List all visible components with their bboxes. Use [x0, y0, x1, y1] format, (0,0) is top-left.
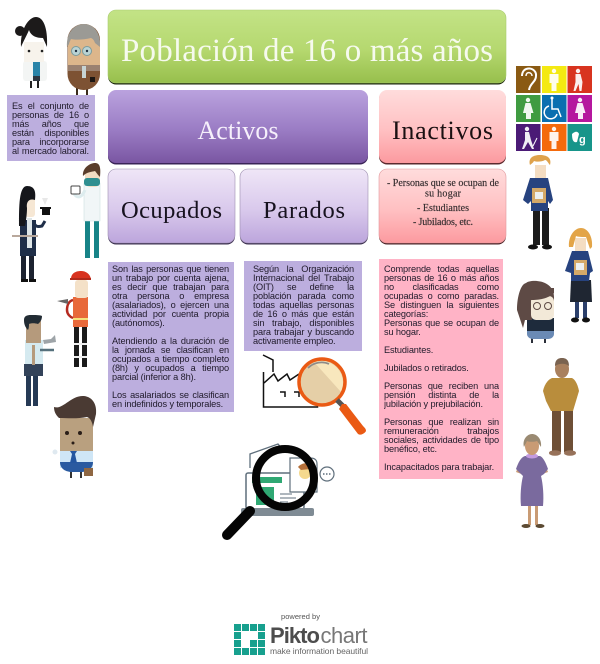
- character: waiter: [24, 315, 56, 406]
- box: list of inactive groups: [379, 169, 506, 244]
- footer: powered by Piktochart: chart: [320, 623, 368, 648]
- character: girl with glasses: [517, 281, 554, 343]
- character: elderly woman in dress: [516, 434, 548, 528]
- character: firefighter: [57, 271, 91, 367]
- box: Ocupados: [108, 169, 235, 244]
- character: student girl: [565, 228, 593, 322]
- icon: laptop under black magnifier: [227, 443, 334, 535]
- box: list of inactive groups: - Estudiantes: [417, 203, 469, 214]
- box: Ocupados: Ocupados: [121, 197, 222, 224]
- title box: [108, 10, 506, 84]
- character: businessman: [52, 396, 96, 478]
- box: list of inactive groups: - Jubilados, etc.: [413, 217, 473, 228]
- character: doctor with tablet: [71, 163, 100, 258]
- footer: powered by Piktochart: Pikto: [270, 623, 320, 648]
- footer: powered by Piktochart: [234, 612, 368, 656]
- character: woman magician: [12, 186, 51, 282]
- box: Parados: Parados: [263, 197, 345, 224]
- character: scientist woman: [15, 17, 47, 88]
- character: elderly man: [67, 24, 100, 96]
- icon grid: accessibility symbols: [516, 66, 592, 151]
- character: elderly man in sweater: [543, 358, 579, 456]
- box: list of inactive groups: su hogar: [425, 188, 462, 200]
- text panel: ocupados: [108, 262, 234, 412]
- footer: powered by Piktochart: powered by: [281, 612, 320, 621]
- text panel: inactivos: [379, 259, 503, 479]
- icon: factory under orange magnifier: [263, 355, 366, 435]
- box: list of inactive groups: - Personas que se ocupan de: [387, 178, 500, 189]
- footer: powered by Piktochart: make information beautiful: [270, 646, 368, 656]
- icon grid: accessibility symbols: g: [579, 134, 586, 146]
- text panel: parados: [244, 261, 362, 351]
- box: Inactivos: Inactivos: [392, 116, 493, 145]
- title box: Población de 16 o más años: [121, 33, 493, 69]
- box: Inactivos: [379, 90, 506, 164]
- box: Activos: [108, 90, 368, 164]
- character: student boy: [523, 155, 553, 250]
- box: Parados: [240, 169, 368, 244]
- box: Activos: Activos: [198, 116, 278, 145]
- text panel: definition: [7, 95, 95, 161]
